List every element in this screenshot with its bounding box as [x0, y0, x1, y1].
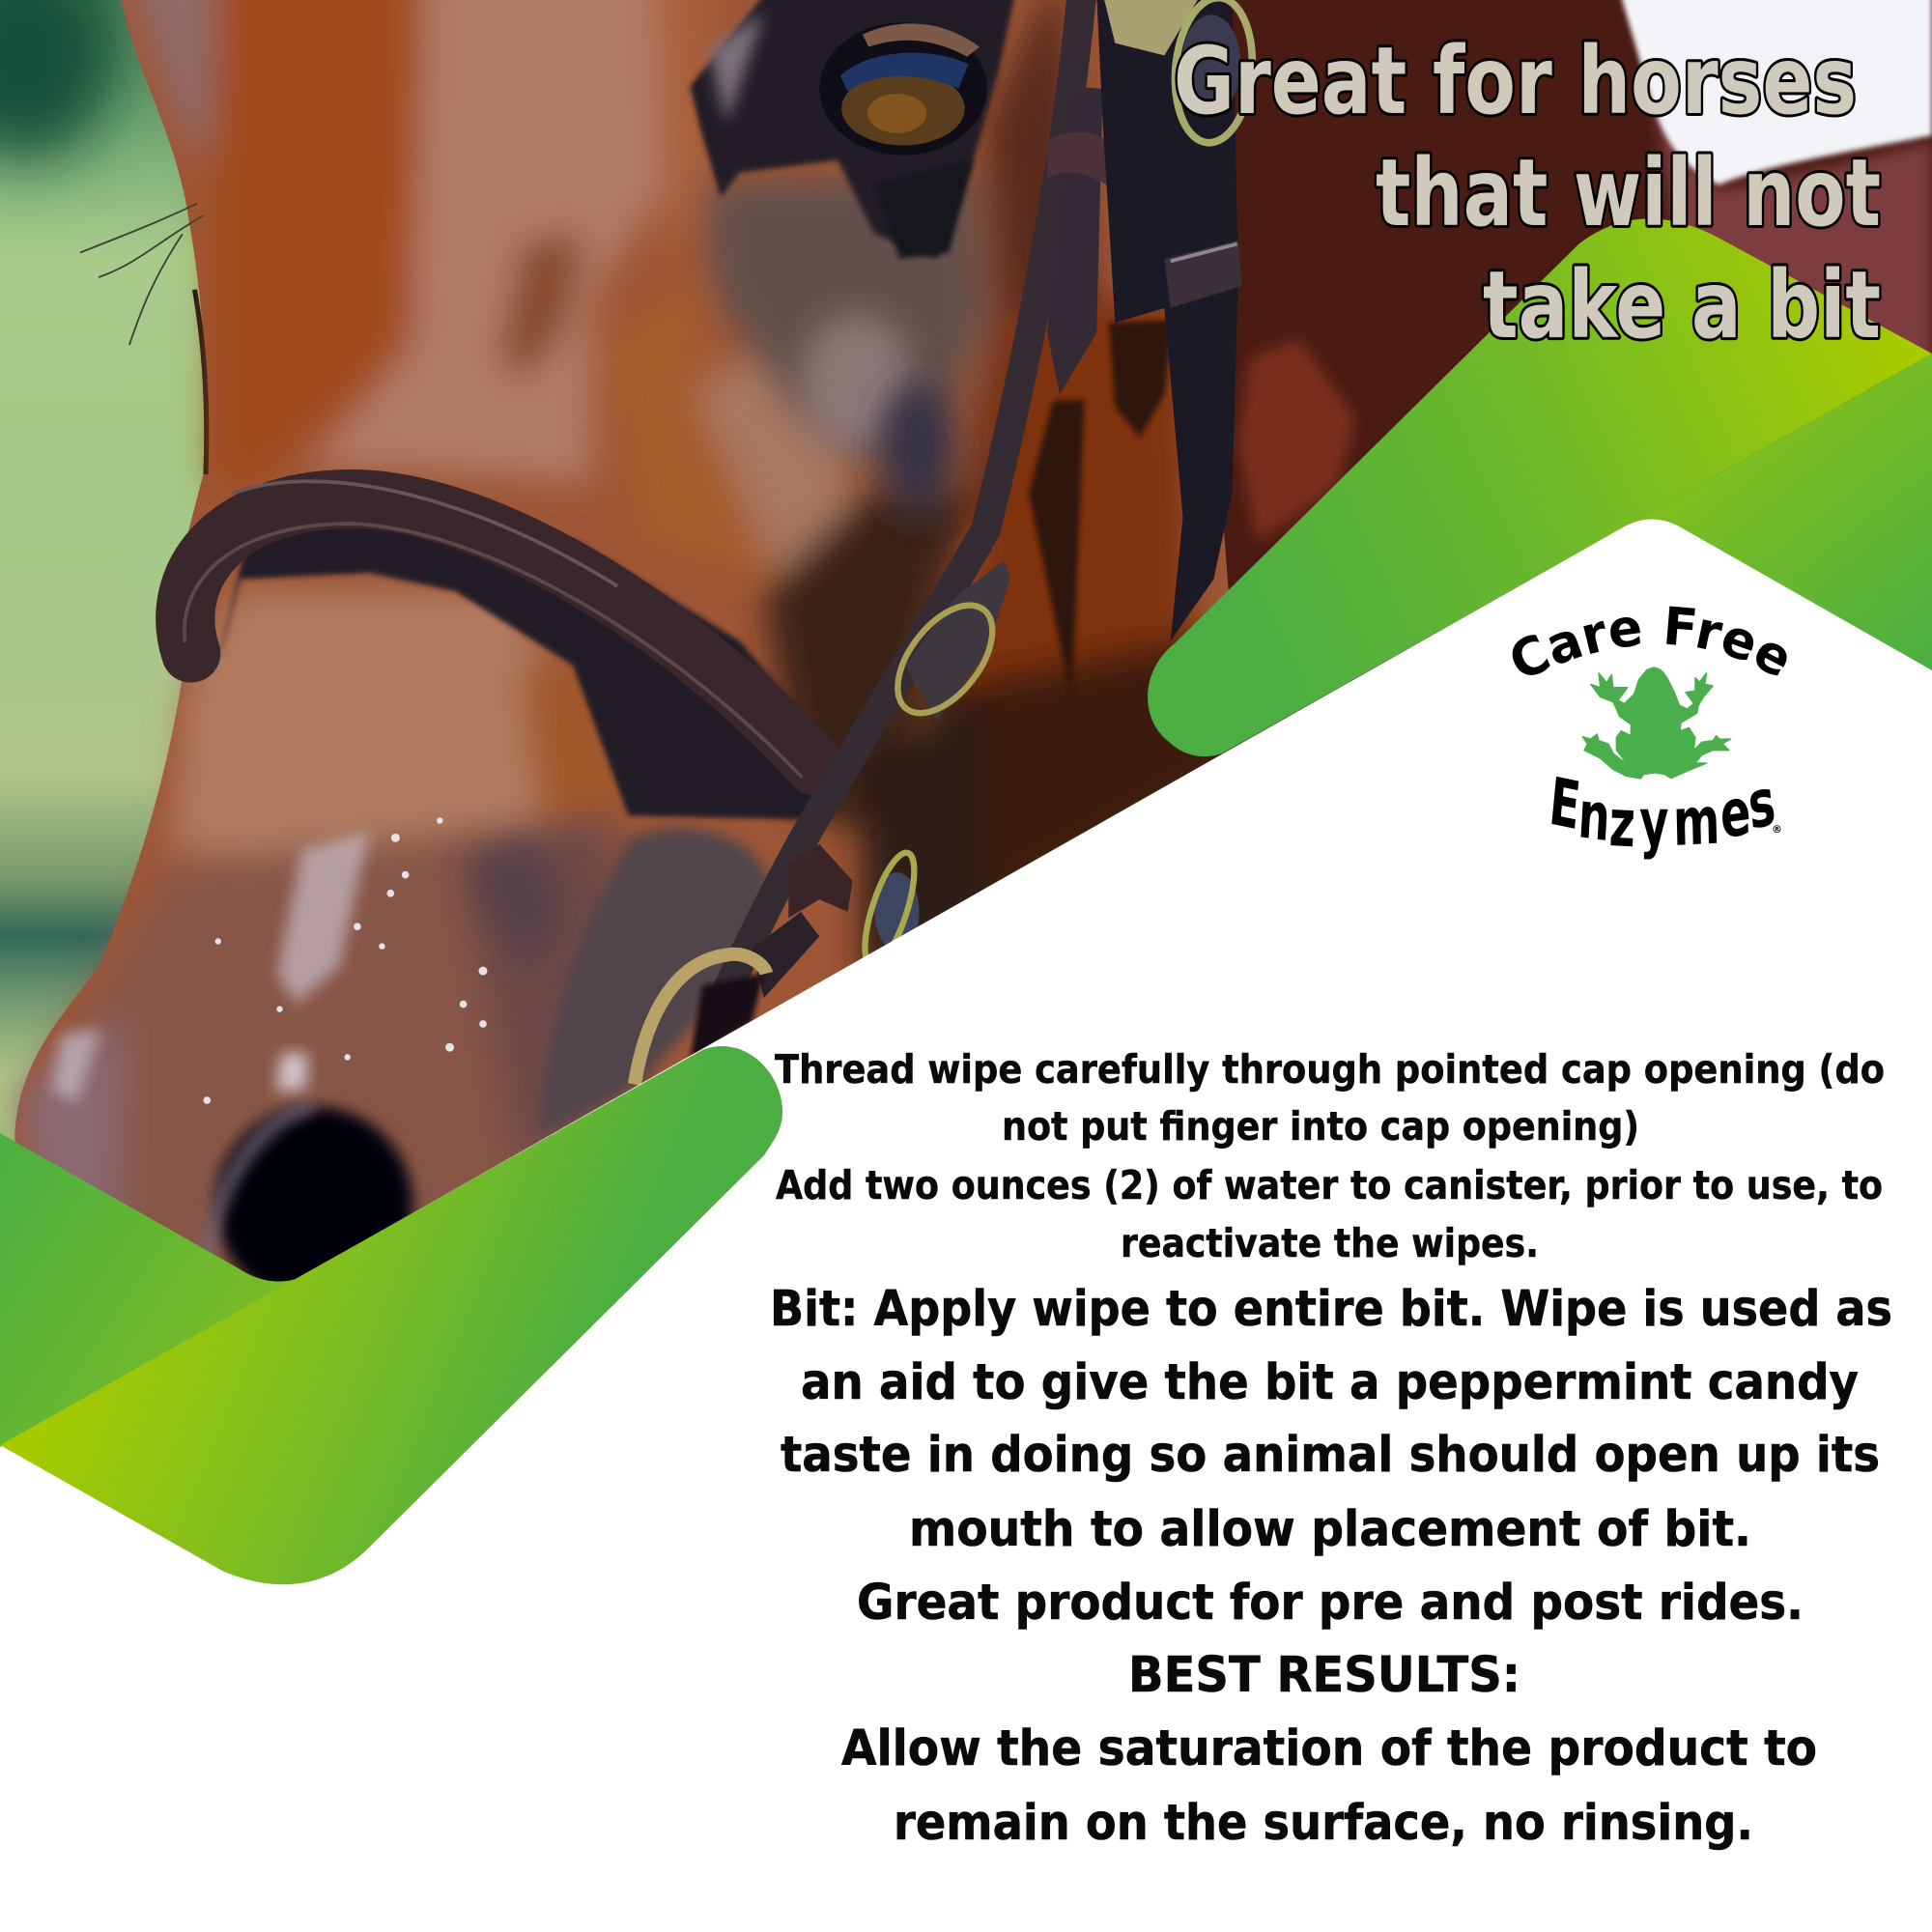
eye socket — [690, 0, 1016, 259]
photo background: blurred green field — [0, 0, 321, 1171]
lip — [542, 828, 770, 1133]
text block: instructions: Allow the saturation of the product to — [841, 1720, 1817, 1777]
green band: lower left chevron — [0, 1046, 782, 1584]
text block: instructions: reactivate the wipes. — [1121, 1220, 1539, 1266]
wet highlights on the muzzle — [52, 817, 487, 1104]
photo: horse head wearing a bridle — [0, 0, 1932, 1306]
dark edge of the face — [195, 290, 207, 474]
green band: upper right — [1148, 218, 1932, 756]
text block: instructions: mouth to allow placement of bit. — [909, 1501, 1751, 1558]
crease on the muzzle — [474, 838, 567, 974]
text block: instructions: Great product for pre and post rides. — [857, 1575, 1804, 1632]
throat strap with keeper — [1096, 0, 1242, 640]
text block: instructions — [770, 1046, 1892, 1852]
text block: instructions: an aid to give the bit a peppermint candy — [801, 1354, 1859, 1411]
text block: instructions: remain on the surface, no rinsing. — [894, 1795, 1753, 1852]
horse coat colour patches — [18, 0, 1244, 1293]
rings and bit hardware — [635, 0, 1258, 1084]
icon: horse eye — [819, 22, 987, 156]
text block: instructions: BEST RESULTS: — [1128, 1647, 1520, 1704]
cheek shadows and highlights — [801, 314, 1173, 702]
registered mark: ® — [1772, 823, 1782, 836]
buckle at the brow — [1103, 0, 1202, 55]
shadow beneath noseband — [215, 505, 850, 819]
cheek strap with keepers — [721, 0, 1122, 1005]
icon: green frog — [1582, 668, 1731, 779]
horse face base — [14, 0, 1232, 1306]
headline — [1174, 27, 1881, 359]
logo wordmark: Enzymes: Enzymes — [1547, 762, 1778, 863]
noseband strap — [185, 481, 815, 777]
green band: right triangle — [1565, 354, 1932, 734]
nostril — [203, 1105, 412, 1303]
green band: lower left wedge — [0, 1133, 324, 1447]
photo background: dark bay body and white sky — [863, 0, 1932, 1060]
white diagonal panel — [0, 520, 1932, 1932]
logo: Care Free Enzymes — [1513, 607, 1787, 863]
whiskers at the jaw line — [80, 203, 203, 345]
logo wordmark: Care Free: Care Free — [1513, 607, 1787, 676]
text block: instructions: not put finger into cap opening) — [1002, 1103, 1639, 1150]
